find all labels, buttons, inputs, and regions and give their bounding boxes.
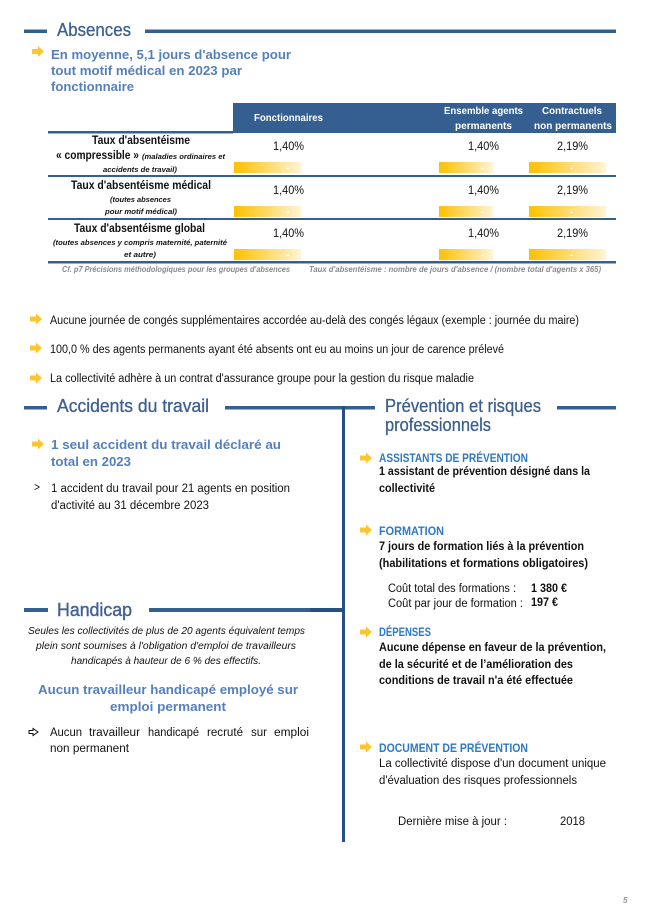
key message: accidents: total en 2023: [51, 454, 131, 469]
row: medical absenteeism: (toutes absences: [110, 195, 171, 204]
key message: accidents: [51, 437, 281, 469]
heading: Absences: Absences: [57, 19, 131, 40]
block: dépenses: conditions de travail n'a été effectuée: [379, 675, 573, 687]
block: dépenses: Aucune dépense en faveur de la prévention,: [379, 642, 606, 654]
training costs: 197 €: [531, 597, 559, 609]
block: document de prévention: 2018: [560, 816, 585, 828]
panel: accidents du travail: [24, 395, 342, 512]
training costs: [388, 583, 568, 610]
heading: Accidents du travail: [24, 395, 342, 416]
row: global absenteeism: [53, 221, 606, 261]
legal note: [28, 626, 305, 667]
heading: Absences: [24, 19, 616, 40]
row: global absenteeism: Taux d'absentéisme global: [74, 221, 205, 235]
table footnotes: Taux d'absentéisme : nombre de jours d'absence / (nombre total d'agents x 365): [309, 265, 601, 274]
table header: Ensemble agents: [444, 105, 523, 117]
detail: non permanent: handicapé: [148, 727, 199, 739]
row: compressible absenteeism: -: [570, 163, 573, 174]
block: document de prévention: d'évaluation des risques professionnels: [379, 775, 577, 787]
key message: handicap: [38, 682, 298, 714]
row: medical absenteeism: 1,40%: [273, 183, 304, 197]
detail: non permanent: [29, 727, 309, 755]
block: document de prévention: [360, 742, 606, 828]
training costs: Coût total des formations :: [388, 583, 516, 595]
heading: Handicap: [24, 600, 343, 620]
table header: non permanents: [534, 120, 612, 132]
detail: non permanent: emploi: [274, 727, 309, 739]
bullet list: absence facts: Aucune journée de congés supplémentaires accordée au-delà des congés légaux (exemple : journée du maire): [50, 315, 579, 327]
row: medical absenteeism: pour motif médical): [104, 207, 178, 216]
column divider: [342, 406, 345, 842]
panel: handicap: [24, 600, 343, 755]
training costs: Coût par jour de formation :: [388, 598, 523, 610]
row: medical absenteeism: -: [570, 207, 573, 218]
row: compressible absenteeism: (maladies ordinaires et: [142, 152, 226, 161]
row: compressible absenteeism: accidents de travail): [103, 165, 178, 174]
key message: average absence days: fonctionnaire: [51, 79, 134, 94]
legal note: Seules les collectivités de plus de 20 agents équivalent temps: [28, 626, 305, 637]
row: global absenteeism: et autre): [124, 250, 157, 259]
row: compressible absenteeism: -: [481, 163, 484, 174]
detail: accident per agents: [34, 482, 290, 512]
training costs: 1 380 €: [531, 583, 568, 595]
row: medical absenteeism: Taux d'absentéisme médical: [71, 178, 211, 192]
block: document de prévention: La collectivité dispose d'un document unique: [379, 758, 606, 770]
heading: Accidents du travail: Accidents du travail: [57, 395, 209, 416]
key message: accidents: 1 seul accident du travail déclaré au: [51, 437, 281, 452]
block: assistants de prévention: [360, 452, 591, 495]
page number: 5: [623, 896, 628, 905]
row: global absenteeism: 2,19%: [557, 226, 588, 240]
detail: accident per agents: d'activité au 31 décembre 2023: [51, 500, 209, 512]
block: dépenses: DÉPENSES: [379, 626, 431, 639]
key message: handicap: emploi permanent: [110, 699, 227, 714]
key message: average absence days: [51, 47, 291, 94]
block: formation: FORMATION: [379, 526, 444, 538]
detail: non permanent: travailleur: [89, 727, 140, 739]
row: medical absenteeism: 2,19%: [557, 183, 588, 197]
row: medical absenteeism: 1,40%: [468, 183, 499, 197]
row: compressible absenteeism: 2,19%: [557, 139, 588, 153]
block: formation: [360, 524, 588, 610]
key message: average absence days: tout motif médical en 2023 par: [51, 63, 242, 78]
table header: Fonctionnaires: [254, 112, 323, 124]
row: global absenteeism: 1,40%: [273, 226, 304, 240]
heading: Prévention et risques professionnels: Prévention et risques: [385, 395, 541, 416]
row: compressible absenteeism: Taux d'absentéisme: [92, 133, 190, 147]
table header: [48, 103, 616, 134]
detail: accident per agents: 1 accident du travail pour 21 agents en position: [51, 483, 290, 495]
block: dépenses: de la sécurité et de l’amélioration des: [379, 659, 573, 671]
block: assistants de prévention: 1 assistant de prévention désigné dans la: [379, 466, 591, 478]
block: formation: 7 jours de formation liés à la prévention: [379, 541, 584, 553]
detail: non permanent: recruté: [207, 727, 243, 739]
key message: average absence days: En moyenne, 5,1 jours d'absence pour: [51, 47, 291, 62]
row: medical absenteeism: [71, 178, 606, 218]
block: formation: (habilitations et formations obligatoires): [379, 558, 588, 570]
detail: accident per agents: >: [34, 482, 40, 494]
block: dépenses: [360, 626, 606, 687]
panel: prévention et risques professionnels: [345, 395, 616, 828]
table header: Contractuels: [542, 105, 602, 117]
row: compressible absenteeism: « compressible »: [56, 148, 139, 162]
row: global absenteeism: -: [570, 250, 573, 261]
legal note: plein sont soumises à l'obligation d'emploi de travailleurs: [35, 641, 296, 652]
table: absenteeism rates: [48, 103, 616, 264]
bullet list: absence facts: 100,0 % des agents permanents ayant été absents ont eu au moins un jour de carence prélevé: [50, 344, 504, 356]
table footnotes: Cf. p7 Précisions méthodologiques pour les groupes d'absences: [62, 265, 291, 274]
block: document de prévention: Dernière mise à jour :: [398, 816, 507, 828]
panel: absences: [24, 19, 616, 385]
icon: yellow arrow: [32, 438, 44, 450]
row: global absenteeism: 1,40%: [468, 226, 499, 240]
detail: non permanent: Aucun: [50, 727, 82, 739]
heading: Prévention et risques professionnels: professionnels: [385, 414, 491, 435]
block: assistants de prévention: collectivité: [379, 483, 435, 495]
heading: Prévention et risques professionnels: [345, 395, 616, 435]
row: compressible absenteeism: -: [286, 163, 289, 174]
key message: handicap: Aucun travailleur handicapé employé sur: [38, 682, 298, 697]
bullet list: absence facts: La collectivité adhère à un contrat d'assurance groupe pour la gestion du risque maladie: [50, 373, 474, 385]
row: compressible absenteeism: [56, 133, 606, 174]
block: document de prévention: DOCUMENT DE PRÉVENTION: [379, 742, 528, 755]
row: compressible absenteeism: 1,40%: [273, 139, 304, 153]
bullet list: absence facts: [30, 314, 579, 385]
table footnotes: [62, 265, 601, 274]
row: global absenteeism: (toutes absences y compris maternité, paternité: [53, 238, 227, 247]
row: global absenteeism: -: [481, 250, 484, 261]
detail: non permanent: non permanent: [50, 743, 130, 755]
table header: permanents: [455, 120, 512, 132]
detail: non permanent: sur: [251, 727, 267, 739]
row: medical absenteeism: -: [481, 207, 484, 218]
block: assistants de prévention: ASSISTANTS DE PRÉVENTION: [379, 452, 528, 465]
heading: Handicap: Handicap: [57, 600, 132, 620]
row: global absenteeism: -: [286, 250, 289, 261]
row: medical absenteeism: -: [286, 207, 289, 218]
row: compressible absenteeism: 1,40%: [468, 139, 499, 153]
legal note: handicapés à hauteur de 6 % des effectifs.: [71, 656, 261, 667]
icon: yellow arrow: [32, 46, 44, 57]
